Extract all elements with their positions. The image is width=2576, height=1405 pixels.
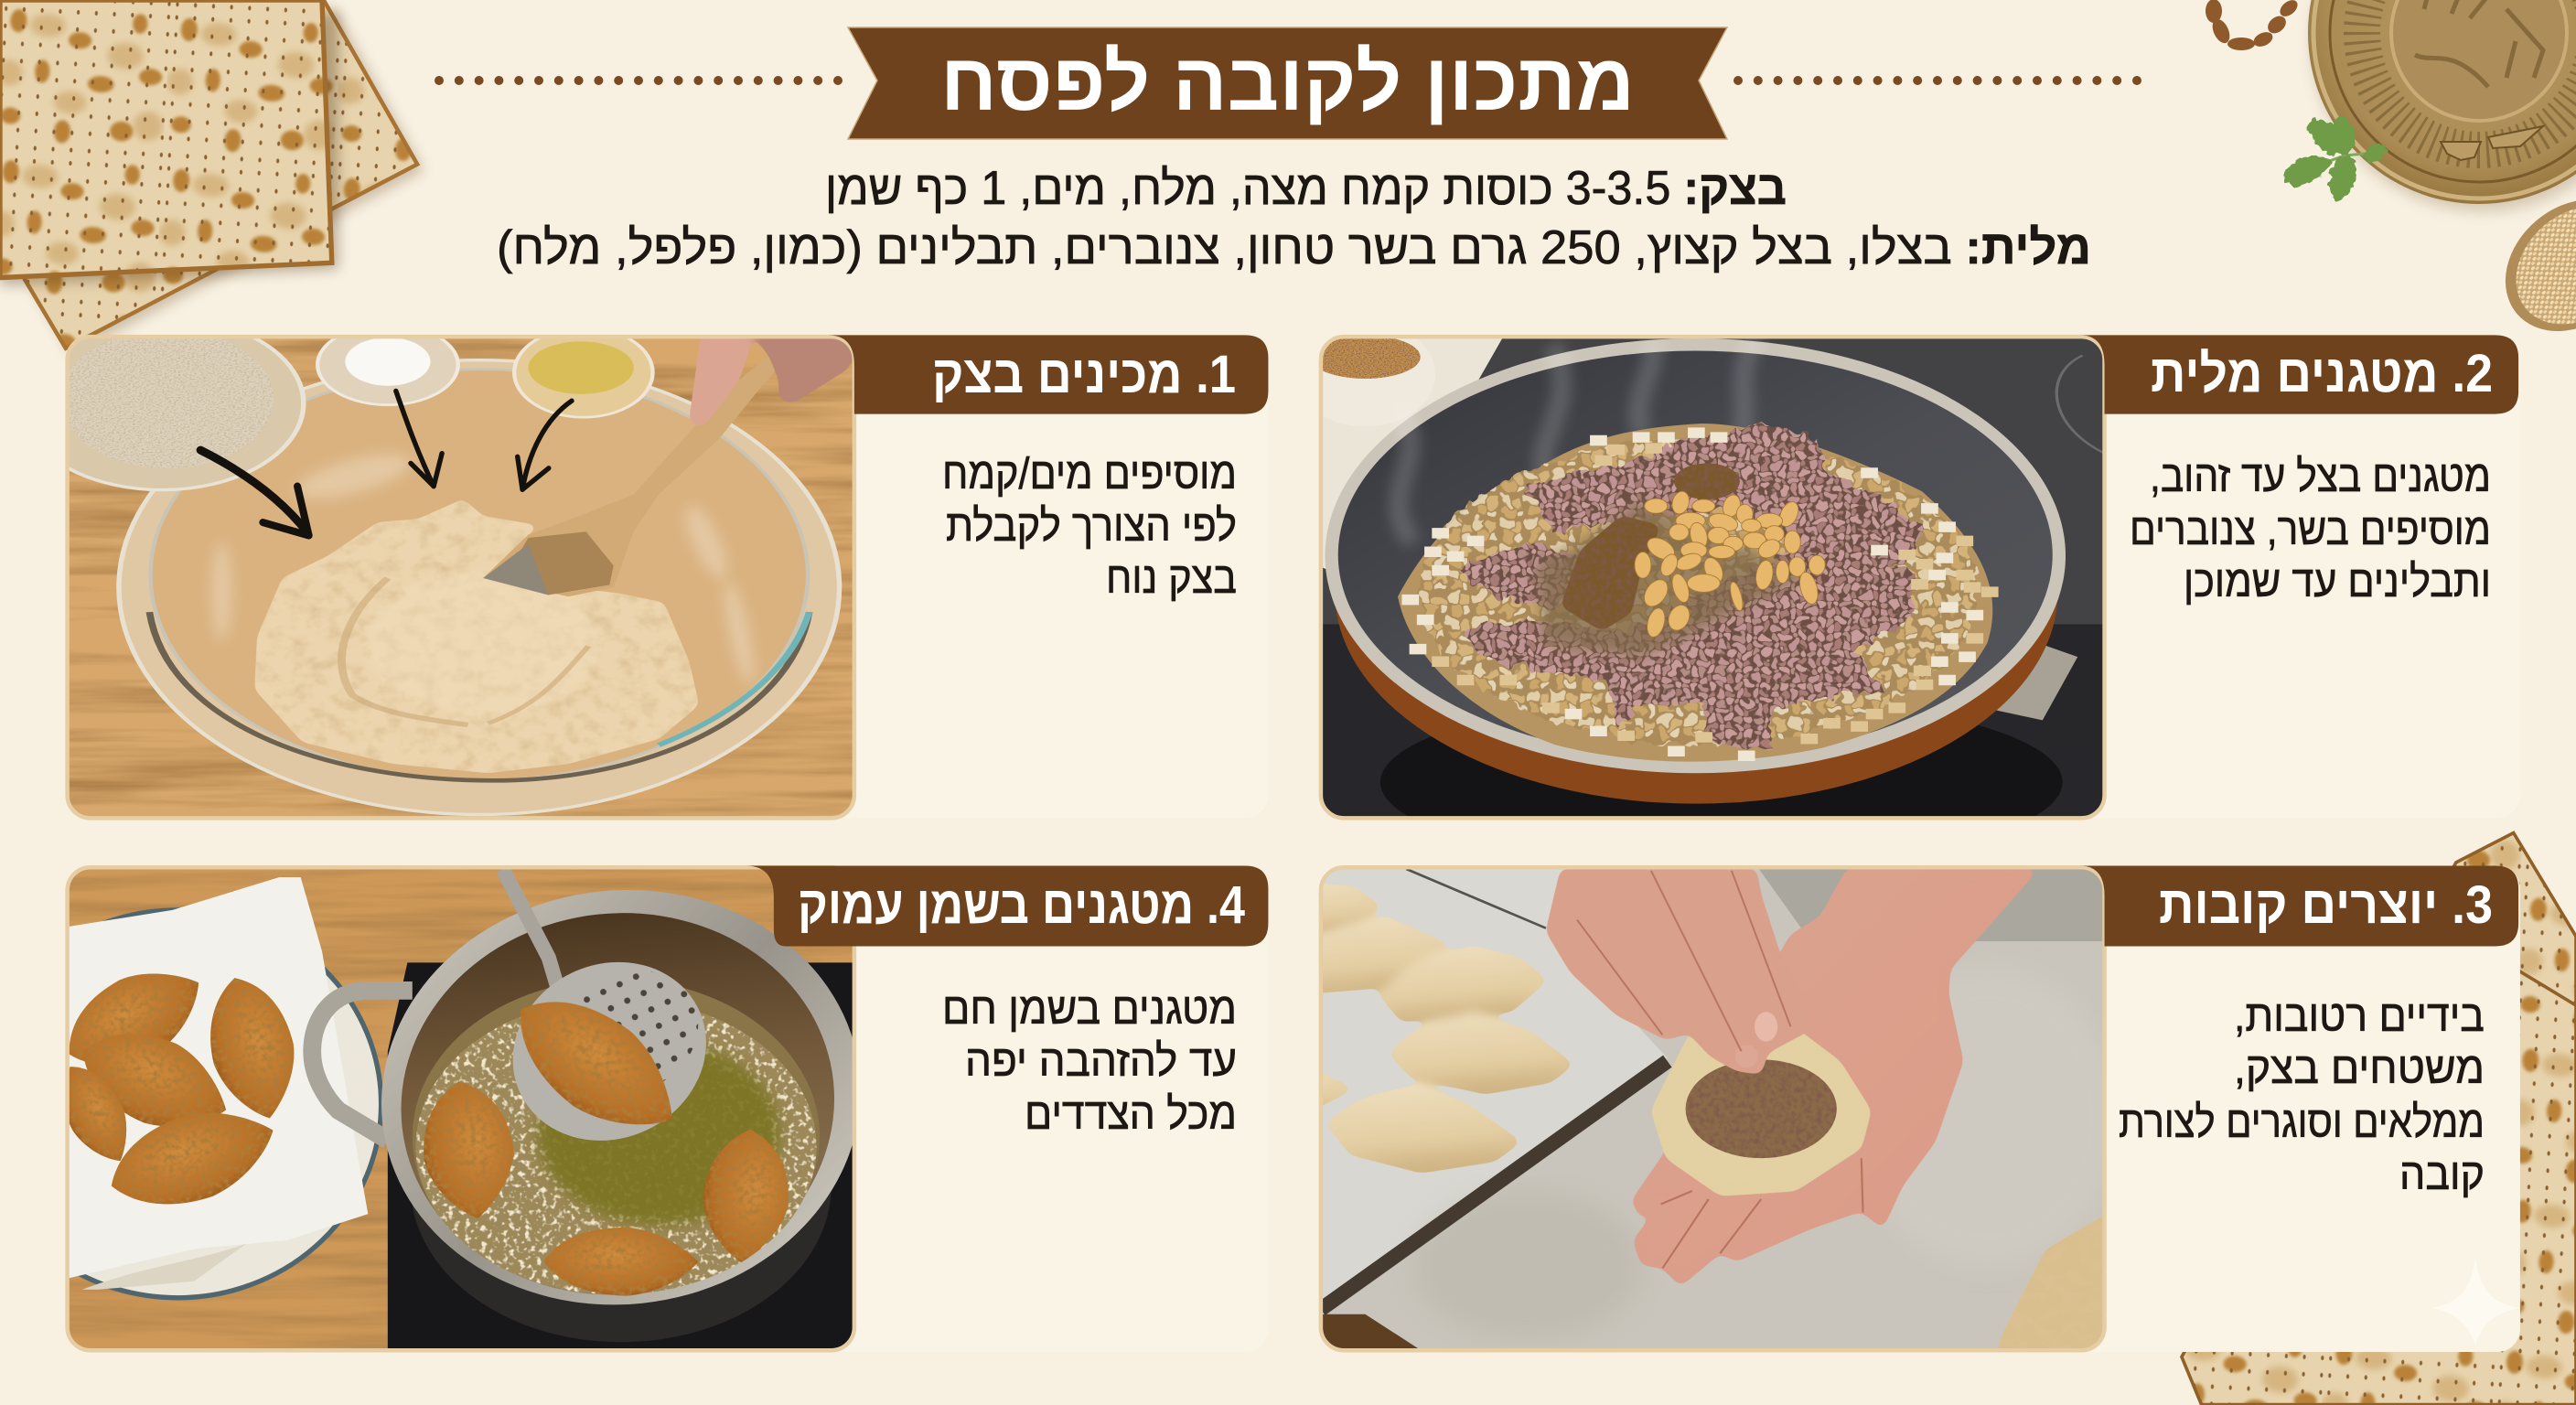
step 3 body: בידיים רטובות,	[2234, 992, 2485, 1041]
dough balls	[1306, 882, 1573, 1173]
steam	[1397, 337, 1758, 542]
step 3 body: ממלאים וסוגרים לצורת	[2119, 1099, 2485, 1147]
decoration: coin, beads, parsley, sesame top right	[2206, 0, 2576, 359]
step 4 body: מכל הצדדים	[1025, 1090, 1237, 1139]
salt bowl	[317, 325, 458, 405]
panel: step 2 filling	[1295, 321, 2520, 869]
flour bowl	[70, 338, 306, 492]
meat	[1459, 424, 1926, 749]
dotted rule left	[439, 76, 838, 85]
pine nuts	[1635, 489, 1825, 639]
ladle with kubbeh	[483, 869, 735, 1172]
panel: step 3 shaping	[1306, 865, 2520, 1372]
step 2 body: מוסיפים בשר, צנוברים	[2130, 506, 2491, 554]
photo: dough in glass bowl	[70, 338, 853, 816]
step 4 body: עד להזהבה יפה	[965, 1037, 1237, 1086]
panel: step 1 dough	[20, 316, 1268, 818]
icon: lower hand	[1631, 869, 2039, 1286]
oil bowl	[514, 327, 653, 417]
tab heading 4: 4. מטגנים בשמן עמוק	[798, 875, 1245, 935]
title banner: מתכון לקובה לפסח	[940, 37, 1635, 127]
plate with paper towel	[0, 877, 381, 1298]
step 3 body	[2119, 992, 2485, 1199]
panel: step 4 frying	[0, 865, 1268, 1352]
photo: frying filling in pan	[1295, 321, 2107, 869]
ingredients text: בצק: 3-3.5 כוסות קמח מצה, מלח, מים, 1 כף שמן	[825, 162, 1787, 215]
decoration: matzah top left	[0, 0, 424, 355]
step 1 body	[942, 450, 1237, 603]
tab heading 2: 2. מטגנים מלית	[2151, 344, 2493, 403]
step 2 body	[2130, 453, 2491, 606]
ingredients text	[497, 162, 2091, 274]
photo: hands shaping kubbeh	[1306, 867, 2120, 1372]
tab heading 3: 3. יוצרים קובות	[2159, 875, 2493, 935]
dough disc with filling	[1651, 1022, 1872, 1196]
step 2 body: מטגנים בצל עד זהוב,	[2150, 453, 2491, 501]
step 1 body: מוסיפים מים/קמח	[942, 450, 1237, 499]
onion pieces	[1411, 433, 1990, 756]
decoration: matzah bottom right	[2182, 833, 2576, 1404]
step 4 body: מטגנים בשמן חם	[942, 985, 1237, 1034]
kubbeh on plate	[46, 947, 309, 1227]
tab heading 1: 1. מכינים בצק	[932, 345, 1236, 404]
step 3 body: קובה	[2399, 1151, 2485, 1199]
icon: upper hand	[1546, 869, 1814, 1075]
arrows into the bowl	[200, 391, 572, 535]
step 1 body: לפי הצורך לקבלת	[946, 502, 1237, 551]
dotted rule right	[1738, 76, 2138, 85]
ingredients text: מלית: בצלו, בצל קצוץ, 250 גרם בשר טחון, צנוברים, תבלינים (כמון, פלפל, מלח)	[497, 221, 2091, 274]
photo: deep frying kubbeh	[0, 866, 881, 1350]
title banner	[848, 27, 1727, 139]
pan handle	[2037, 652, 2107, 751]
step 2 body: ותבלינים עד שמוכן	[2184, 558, 2491, 606]
step 3 body: משטחים בצק,	[2234, 1045, 2485, 1093]
step 1 body: בצק נוח	[1106, 554, 1237, 603]
pot	[312, 866, 881, 1342]
step 4 body	[942, 985, 1237, 1139]
sparkle watermark	[2431, 1259, 2519, 1346]
icon: hand holding spoon	[690, 338, 853, 425]
